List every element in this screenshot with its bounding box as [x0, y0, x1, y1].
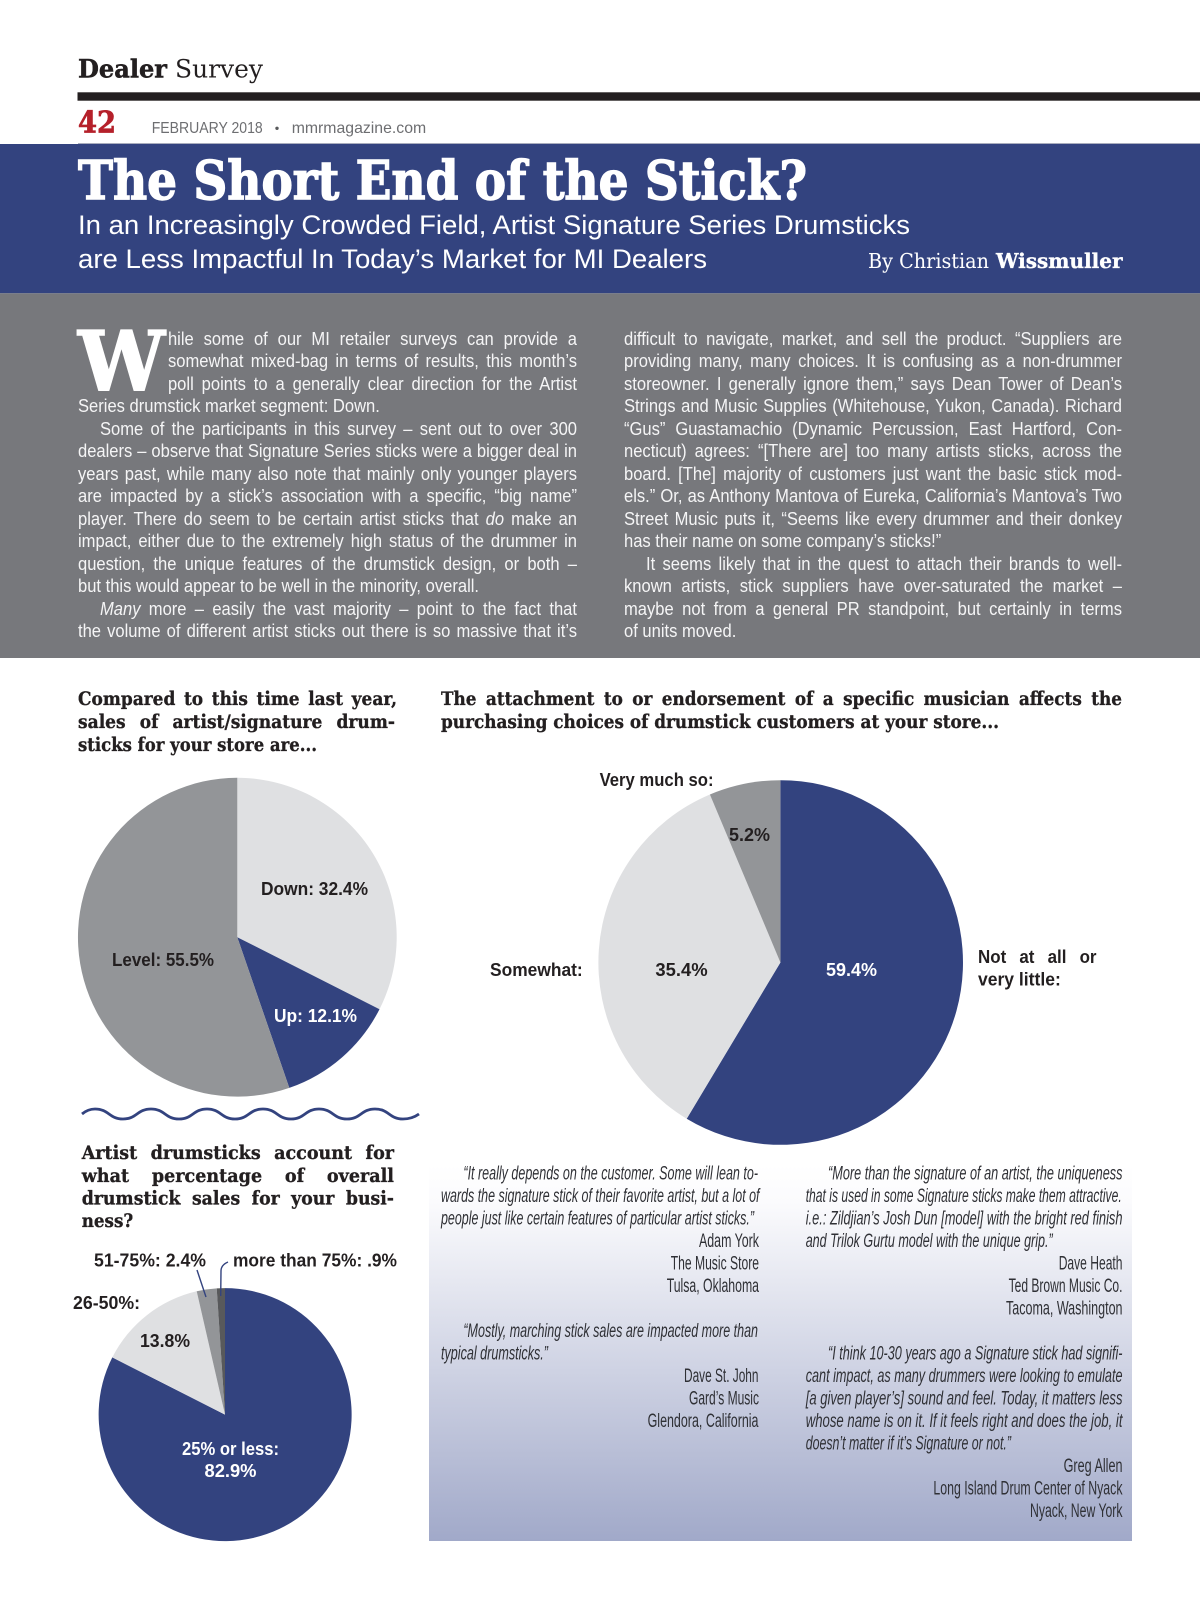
pie chart: musician endorsement: [490, 770, 1096, 1145]
question 2 heading: The attachment to or endorsement of a specific musician affects the: [441, 688, 1122, 710]
pie chart: musician endorsement: Not at all or: [978, 947, 1096, 967]
quote: Greg Allen: doesn’t matter if it’s Signature or not.”: [806, 1434, 1012, 1454]
pie chart: sales vs last year: Level: 55.5%: [112, 950, 214, 970]
article text: right column: board. [The] majority of customers just want the basic stick mod-: [624, 464, 1122, 484]
quote: Greg Allen: Nyack, New York: [1030, 1501, 1123, 1522]
article text: left column: are impacted by a stick’s association with a specific, “big name”: [78, 486, 577, 506]
pie chart: share of drumstick sales: 26-50%:: [73, 1293, 140, 1313]
quote: Dave Heath: and Trilok Gurtu model with the unique grip.”: [806, 1231, 1054, 1252]
subtitle: In an Increasingly Crowded Field, Artist Signature Series Drumsticks: [78, 210, 910, 240]
pie chart: share of drumstick sales: 51-75%: 2.4%: [94, 1251, 206, 1271]
article text: left column: somewhat mixed-bag in terms of results, this month’s: [168, 351, 577, 371]
question 1 heading: Compared to this time last year,: [78, 688, 397, 710]
article text: left column: but this would appear to be well in the minority, overall.: [78, 576, 479, 596]
question 1 heading: sticks for your store are...: [78, 734, 317, 756]
subtitle: are Less Impactful In Today’s Market for MI Dealers: [78, 244, 707, 274]
article text: left column: hile some of our MI retailer surveys can provide a: [168, 329, 577, 349]
pie chart: musician endorsement: very little:: [978, 970, 1061, 990]
article text: right column: difficult to navigate, market, and sell the product. “Suppliers are: [624, 329, 1122, 349]
article text: right column: “Gus” Guastamachio (Dynamic Percussion, East Hartford, Con-: [624, 419, 1122, 439]
pie chart: share of drumstick sales: 13.8%: [140, 1331, 190, 1351]
pie chart: musician endorsement: Somewhat:: [490, 960, 583, 980]
article text: left column: Series drumstick market segment: Down.: [78, 396, 380, 416]
quote: Dave St. John: [441, 1321, 759, 1432]
quote: Adam York: “It really depends on the customer. Some will lean to-: [463, 1164, 758, 1184]
article text: right column: maybe not from a general PR standpoint, but certainly in terms: [624, 599, 1122, 619]
title: The Short End of the Stick?: [78, 150, 807, 212]
article text: right column: Street Music puts it, “Seems like every drummer and their donkey: [624, 509, 1122, 529]
article text: right column: els.” Or, as Anthony Mantova of Eureka, California’s Mantova’s Two: [624, 486, 1122, 506]
byline: By Christian: [868, 249, 989, 273]
article text: right column: Strings and Music Supplies (Whitehouse, Yukon, Canada). Richard: [624, 396, 1122, 416]
question 3 heading: Artist drumsticks account for: [81, 1142, 395, 1164]
question 1 heading: sales of artist/signature drum-: [78, 711, 395, 733]
section header: Dealer Survey: Survey: [175, 55, 264, 84]
folio: date and website: FEBRUARY 2018: [152, 120, 263, 137]
panel: title band: [0, 144, 1200, 293]
question 3 heading: ness?: [82, 1210, 133, 1232]
pie chart: sales vs last year: [78, 778, 397, 1097]
article text: left column: years past, while many also note that mainly only younger players: [78, 464, 577, 484]
question 1 heading: [78, 688, 397, 756]
article text: left column: the volume of different artist sticks out there is so massive that it’s: [78, 621, 577, 641]
quote: Dave St. John: “Mostly, marching stick sales are impacted more than: [463, 1321, 758, 1342]
article text: right column: necticut) agrees: “[There are] too many artists sticks, across the: [624, 441, 1122, 461]
article text: right column: has their name on some company’s sticks!”: [624, 531, 941, 551]
pie chart: share of drumstick sales: 82.9%: [204, 1461, 256, 1481]
pie chart: share of drumstick sales: more than 75%: .9%: [233, 1251, 397, 1271]
article text: right column: providing many, many choices. It is confusing as a non-drummer: [624, 351, 1122, 371]
quote: Dave Heath: Ted Brown Music Co.: [1009, 1276, 1122, 1297]
pie chart: musician endorsement: 35.4%: [655, 960, 708, 980]
question 3 heading: [81, 1142, 395, 1232]
folio: date and website: [152, 120, 426, 137]
quote: Dave Heath: Tacoma, Washington: [1006, 1298, 1122, 1320]
byline: Wissmuller: [995, 249, 1124, 273]
article text: right column: of units moved.: [624, 621, 736, 641]
article text: left column: impact, either due to the extremely high status of the drummer in: [78, 531, 577, 551]
question 2 heading: [441, 688, 1122, 733]
article text: left column: question, the unique features of the drumstick design, or both –: [78, 554, 577, 574]
quote: Adam York: Tulsa, Oklahoma: [667, 1276, 759, 1297]
panel: dealer quotes: [429, 1164, 1132, 1541]
article text: left column: poll points to a generally clear direction for the Artist: [168, 374, 577, 394]
quote: Adam York: people just like certain features of particular artist sticks.”: [440, 1208, 755, 1230]
subtitle: [78, 210, 910, 274]
section header: Dealer Survey: [78, 55, 264, 84]
pie chart: sales vs last year: Up: 12.1%: [274, 1006, 357, 1026]
drop cap: W: [77, 314, 167, 410]
article text: right column: storeowner. I generally ignore them,” says Dean Tower of Dean’s: [624, 374, 1122, 394]
header rule: [78, 92, 1200, 101]
pie chart: share of drumstick sales: [73, 1251, 397, 1541]
article text: right column: known artists, stick suppliers have over-saturated the market –: [624, 576, 1122, 596]
byline: [868, 249, 1124, 273]
pie chart: musician endorsement: Very much so:: [600, 770, 714, 790]
quote: Dave Heath: [806, 1164, 1123, 1320]
quote: Dave Heath: Dave Heath: [1059, 1254, 1122, 1274]
article text: left column: Some of the participants in this survey – sent out to over 300: [100, 419, 577, 439]
question 2 heading: purchasing choices of drumstick customers at your store...: [441, 711, 999, 733]
quote: Greg Allen: Greg Allen: [1064, 1456, 1122, 1477]
pie chart: musician endorsement: 59.4%: [826, 960, 877, 980]
section header: Dealer Survey: Dealer: [78, 55, 168, 84]
folio: date and website: mmrmagazine.com: [292, 120, 426, 137]
quote: Adam York: Adam York: [699, 1231, 759, 1252]
wave separator: [82, 1109, 419, 1119]
quote: Dave St. John: Dave St. John: [684, 1366, 758, 1387]
quote: Dave St. John: Gard’s Music: [689, 1388, 759, 1410]
question 3 heading: what percentage of overall: [81, 1165, 394, 1187]
article text: left column: Many more – easily the vast majority – point to the fact that: [100, 599, 577, 619]
panel: article background: [0, 293, 1200, 658]
question 3 heading: drumstick sales for your busi-: [82, 1188, 394, 1210]
quote: Adam York: [440, 1164, 761, 1297]
page number: 42: [78, 106, 116, 140]
article text: left column: player. There do seem to be certain artist sticks that do make an: [78, 509, 577, 529]
article text: right column: [624, 329, 1122, 641]
pie chart: musician endorsement: 5.2%: [729, 825, 770, 845]
pie chart: share of drumstick sales: 25% or less:: [182, 1439, 279, 1459]
article text: left column: dealers – observe that Signature Series sticks were a bigger deal in: [78, 441, 577, 461]
quote: Dave St. John: Glendora, California: [648, 1411, 759, 1432]
quote: Adam York: wards the signature stick of their favorite artist, but a lot of: [441, 1186, 761, 1207]
article text: left column: [78, 329, 577, 641]
quote: Dave St. John: typical drumsticks.”: [441, 1344, 549, 1364]
article text: right column: It seems likely that in the quest to attach their brands to well-: [646, 554, 1122, 574]
pie chart: sales vs last year: Down: 32.4%: [261, 879, 368, 899]
quote: Adam York: The Music Store: [671, 1254, 759, 1274]
quote: Greg Allen: [805, 1344, 1123, 1522]
